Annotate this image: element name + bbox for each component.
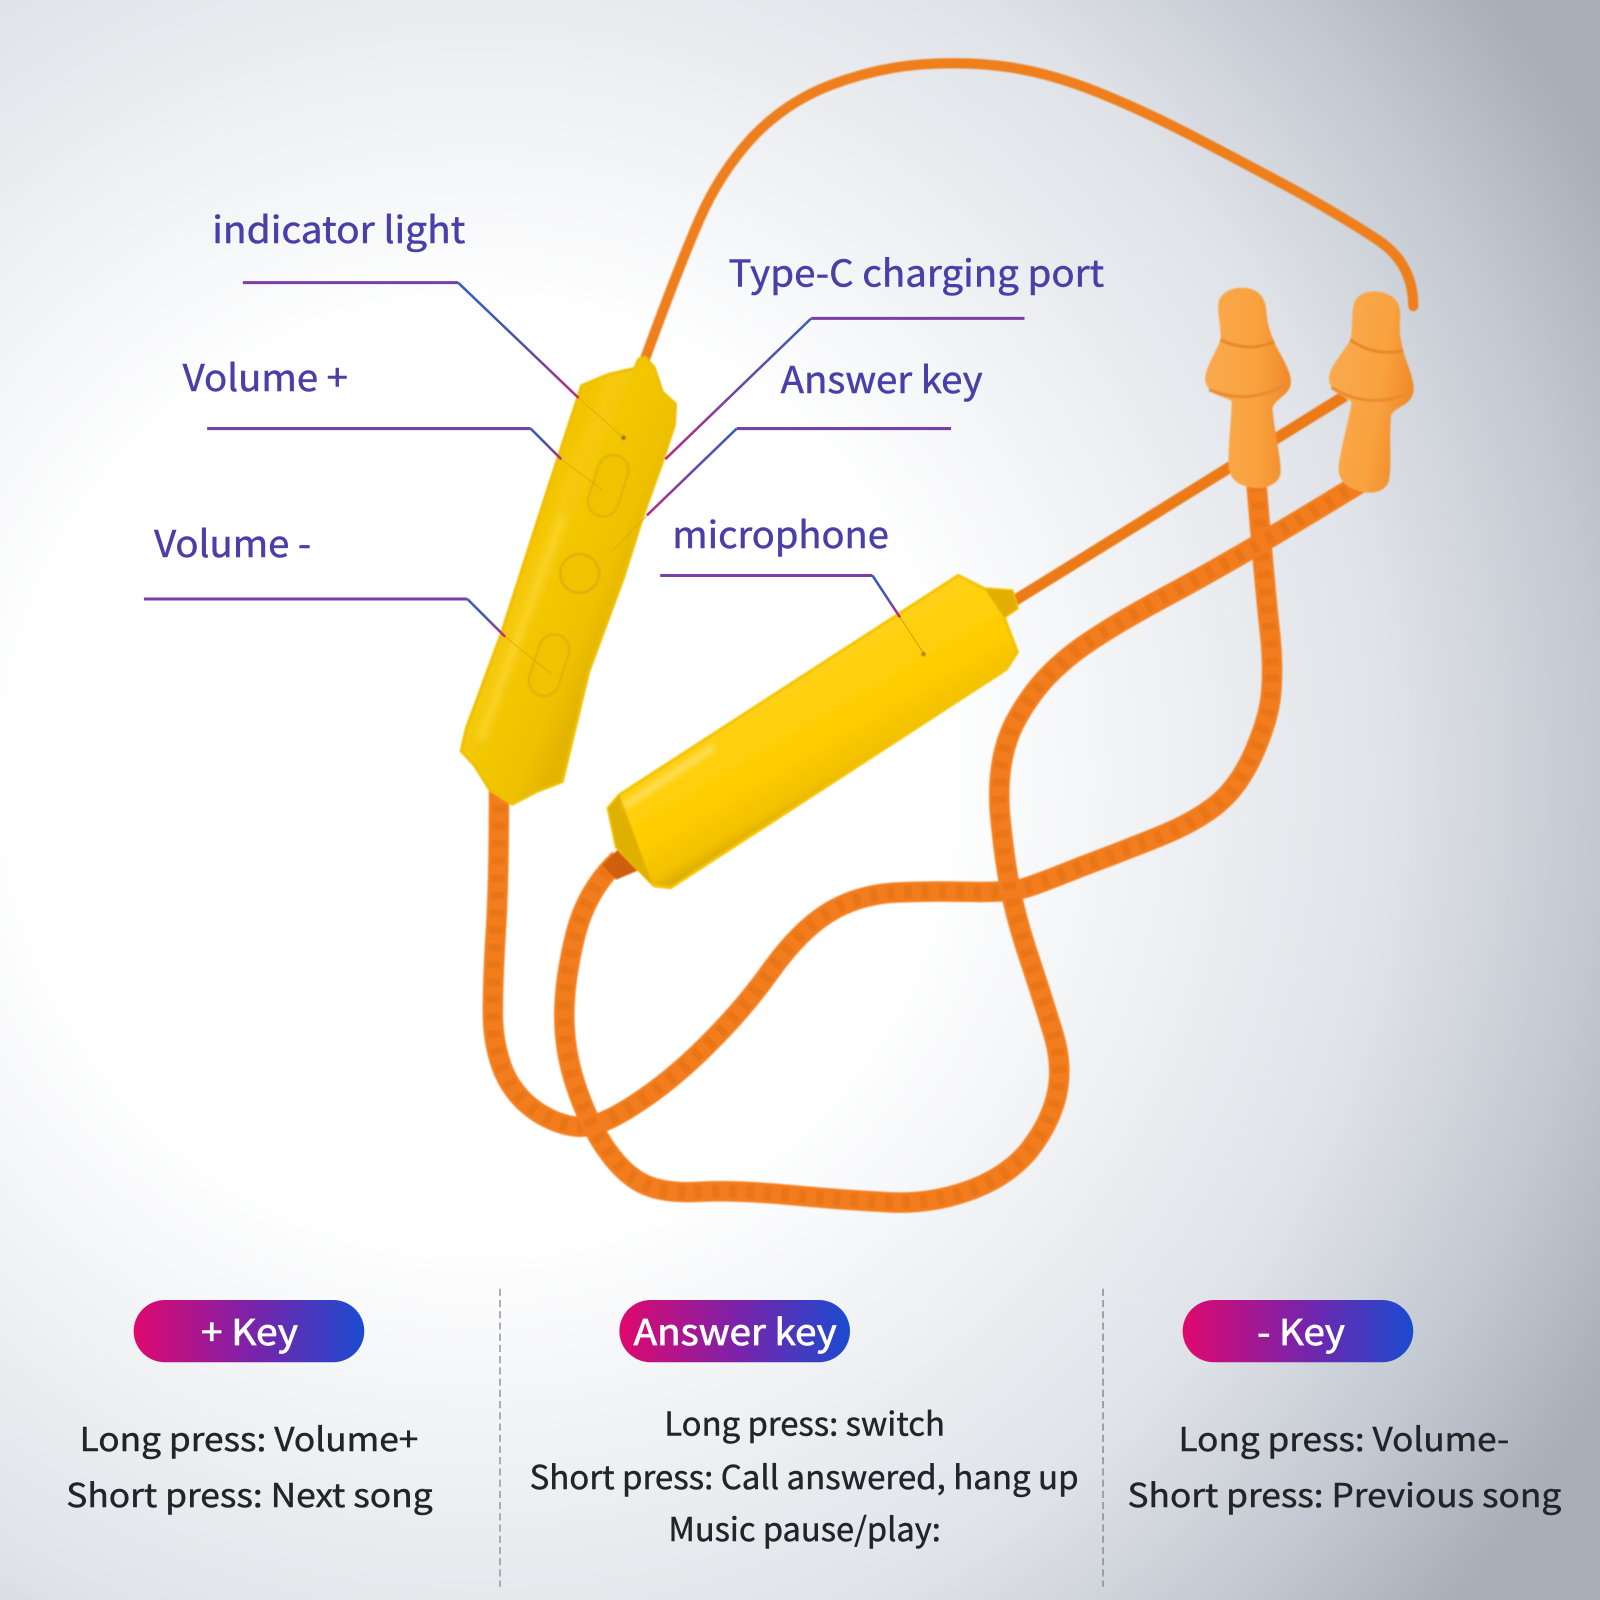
braided rope from right unit: [564, 484, 1359, 1203]
left earplug: [1205, 288, 1291, 488]
right control unit: [608, 576, 1017, 888]
panel: answer key: [530, 1300, 1079, 1551]
callout: volume minus: Volume -: [154, 514, 311, 568]
callout: microphone: [660, 505, 923, 653]
callout: Type-C charging port: [665, 244, 1104, 459]
volume minus button: [525, 630, 573, 700]
pill: - Key: [1183, 1300, 1413, 1362]
thin cable: neck cable to right earplug: [645, 63, 1413, 359]
right earplug: [1312, 286, 1428, 497]
text: minus key description: Short press: Previous song: [1128, 1470, 1561, 1517]
indicator dot: [621, 436, 626, 440]
pill: + Key: + Key: [201, 1305, 298, 1356]
callout: indicator light: indicator light: [212, 200, 465, 254]
text: answer key description: Short press: Call answered, hang up: [530, 1452, 1079, 1499]
rope connector at right unit: [602, 845, 641, 880]
callout: Type-C charging port: Type-C charging port: [729, 244, 1104, 298]
callout: volume minus: [144, 514, 551, 673]
pill: Answer key: Answer key: [634, 1305, 837, 1356]
callout: answer key: [612, 350, 983, 551]
answer button: [560, 554, 599, 593]
braided rope from left unit: [493, 480, 1272, 1127]
panel: plus key: [66, 1300, 433, 1517]
text: plus key description: [66, 1414, 433, 1517]
text: answer key description: [530, 1399, 1079, 1551]
callout: volume plus: [183, 348, 602, 490]
callout: answer key: Answer key: [781, 350, 983, 404]
left control unit: [461, 357, 676, 804]
thin cable: right unit to earplug: [1012, 396, 1345, 602]
callout: volume plus: Volume +: [183, 348, 348, 402]
callout: microphone: microphone: [672, 505, 889, 559]
callout: indicator light: [212, 200, 622, 437]
panel: minus key: [1128, 1300, 1561, 1517]
pill: + Key: [134, 1300, 364, 1362]
text: answer key description: Long press: switch: [664, 1399, 945, 1446]
pill: - Key: - Key: [1257, 1305, 1345, 1356]
text: minus key description: [1128, 1414, 1561, 1517]
microphone dot: [921, 652, 926, 656]
text: answer key description: Music pause/play:: [668, 1504, 941, 1551]
text: minus key description: Long press: Volume-: [1179, 1414, 1509, 1461]
text: plus key description: Short press: Next song: [66, 1470, 433, 1517]
volume plus button: [584, 451, 632, 521]
product illustration: earphones: [461, 63, 1428, 1203]
text: plus key description: Long press: Volume+: [80, 1414, 418, 1461]
pill: Answer key: [619, 1300, 850, 1362]
